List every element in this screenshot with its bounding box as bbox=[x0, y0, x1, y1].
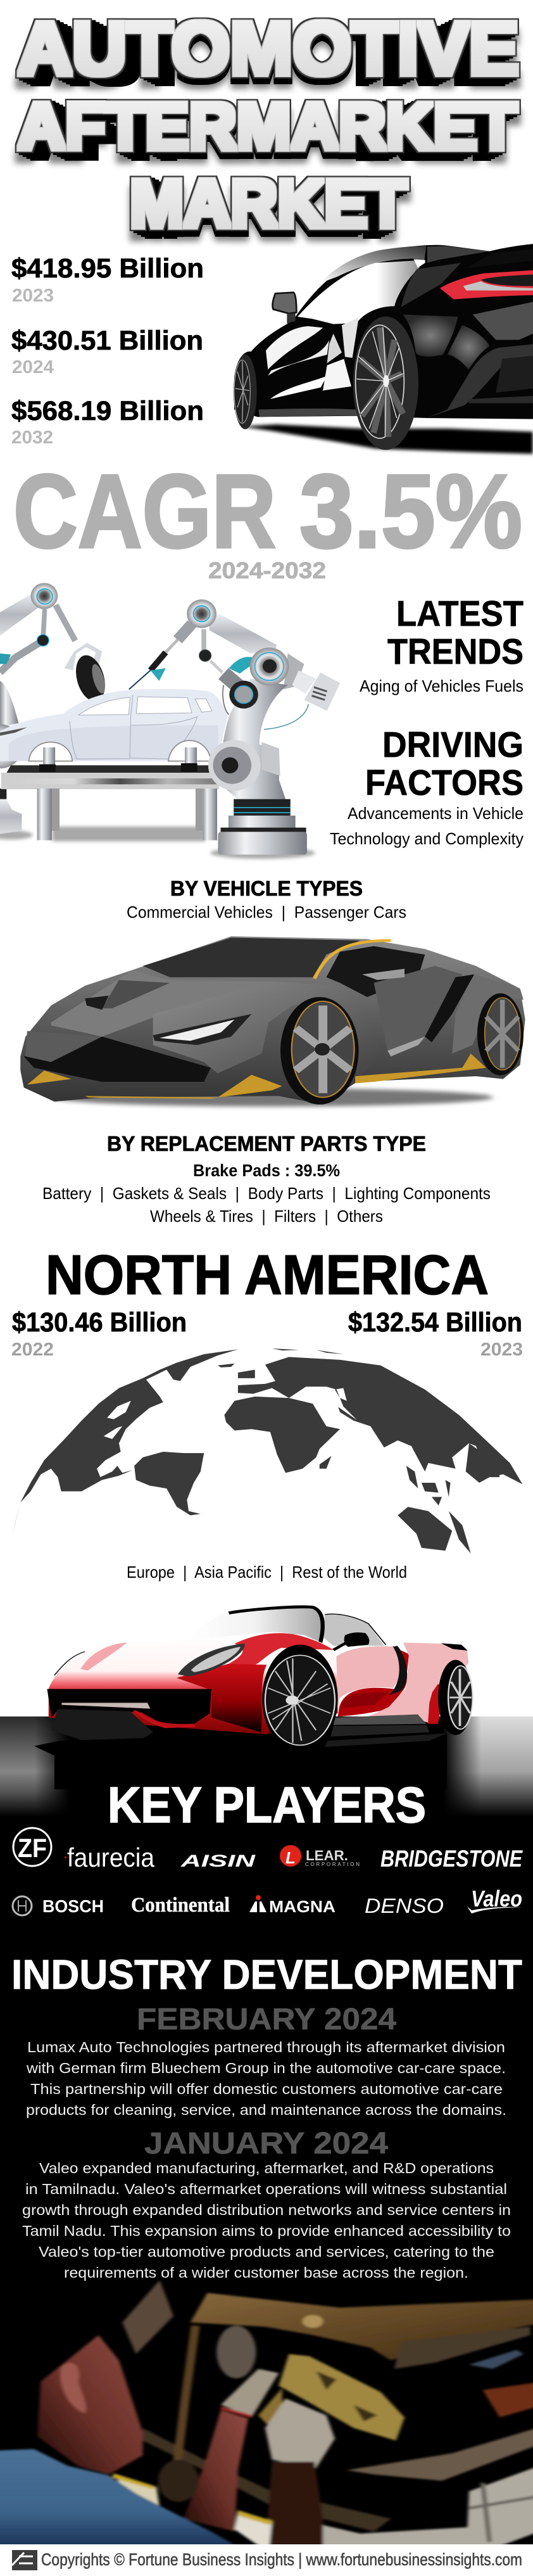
stat: north america 2022: $130.46 Billion bbox=[12, 1307, 187, 1338]
logo: Bosch: BOSCH bbox=[42, 1896, 104, 1916]
heading: driving factors bbox=[365, 725, 524, 803]
text: january 2024 development bbox=[22, 2160, 511, 2281]
CAGR headline: CAGR bbox=[13, 453, 276, 569]
footer background bbox=[0, 2544, 533, 2576]
heading: driving factors: FACTORS bbox=[365, 763, 524, 803]
text: driving factor: Advancements in Vehicle bbox=[348, 804, 524, 823]
text: february 2024 development bbox=[26, 2039, 506, 2118]
text: january 2024 development: requirements of a wider customer base across the region. bbox=[64, 2264, 468, 2281]
text: other regions: Europe | Asia Pacific | Rest of the World bbox=[127, 1563, 407, 1582]
text: january 2024 development: Valeo expanded manufacturing, aftermarket, and R&D operations bbox=[39, 2160, 494, 2176]
icon: Fortune Business Insights logo bbox=[12, 2550, 37, 2570]
logo: AISIN: AISIN bbox=[180, 1851, 256, 1870]
stat: north america 2023: 2023 bbox=[480, 1340, 523, 1360]
text: january 2024 development: Tamil Nadu. This expansion aims to provide enhanced accessibility to bbox=[22, 2223, 511, 2239]
stat: north america 2023 bbox=[348, 1307, 523, 1360]
car body on the line bbox=[0, 689, 228, 766]
logo: ZF bbox=[13, 1828, 51, 1866]
stat: 2023 value: $418.95 Billion bbox=[11, 253, 204, 284]
logo: faurecia: faurecia bbox=[67, 1843, 155, 1872]
text: february 2024 development: products for cleaning, service, and maintenance across the domains. bbox=[26, 2102, 506, 2118]
heading: by vehicle types: BY VEHICLE TYPES bbox=[170, 877, 363, 900]
left robot bbox=[0, 583, 110, 834]
stat: 2024 value bbox=[11, 326, 203, 378]
stat: north america 2022 bbox=[11, 1307, 187, 1360]
right robot bbox=[129, 599, 340, 854]
floor glow: right bbox=[443, 1716, 533, 1817]
stat: 2024 value: $430.51 Billion bbox=[11, 326, 203, 356]
conveyor bbox=[1, 763, 220, 841]
CAGR period: 2024-2032 bbox=[208, 557, 326, 583]
logo: Lear bbox=[280, 1845, 360, 1867]
illustration: red sports car bbox=[34, 1606, 473, 1789]
text: february 2024 development: This partnership will offer domestic customers automotive car-care bbox=[30, 2081, 503, 2097]
floor glow: left bbox=[0, 1716, 70, 1817]
stat: 2032 value: 2032 bbox=[11, 428, 53, 448]
logo: Magna bbox=[249, 1895, 335, 1916]
heading: key players: KEY PLAYERS bbox=[108, 1777, 426, 1833]
text: january 2024 development: growth through expanded distribution networks and service centers in bbox=[22, 2202, 511, 2218]
heading: january 2024: JANUARY 2024 bbox=[144, 2127, 388, 2160]
text: replacement parts list: Battery | Gaskets & Seals | Body Parts | Lighting Components bbox=[42, 1184, 491, 1203]
world map bbox=[13, 1348, 522, 1554]
heading: february 2024: FEBRUARY 2024 bbox=[137, 2003, 396, 2036]
stat: 2023 value: 2023 bbox=[12, 286, 54, 306]
title: line 2: AFTERMARKET bbox=[18, 90, 517, 163]
text: february 2024 development: Lumax Auto Technologies partnered through its aftermarket division bbox=[27, 2039, 505, 2055]
text: latest trend: Aging of Vehicles Fuels bbox=[360, 676, 524, 695]
heading: by replacement parts type: BY REPLACEMENT PARTS TYPE bbox=[107, 1132, 426, 1155]
logo: Lear: CORPORATION bbox=[305, 1862, 360, 1867]
title: line 1: AUTOMOTIVE bbox=[18, 7, 519, 91]
title: line 3: MARKET bbox=[130, 165, 407, 241]
stat: 2023 value bbox=[11, 253, 204, 306]
text: vehicle type list: Commercial Vehicles | Passenger Cars bbox=[127, 903, 406, 922]
text: january 2024 development: Valeo's top-tier automotive products and services, catering to the bbox=[39, 2243, 494, 2260]
logo: ZF: ZF bbox=[18, 1833, 47, 1863]
logo: Continental: Continental bbox=[131, 1894, 230, 1917]
text: driving factor: Technology and Complexity bbox=[330, 829, 524, 848]
logo: Valeo: Valeo bbox=[471, 1886, 522, 1912]
text: driving factor bbox=[330, 804, 524, 848]
heading: latest trends bbox=[387, 593, 524, 672]
CAGR headline: 3.5% bbox=[299, 453, 522, 569]
logo: Lear: L bbox=[285, 1848, 296, 1867]
stat: 2032 value: $568.19 Billion bbox=[11, 396, 204, 426]
stat: north america 2022: 2022 bbox=[11, 1340, 54, 1360]
logo: Bosch bbox=[13, 1896, 104, 1916]
stat: north america 2023: $132.54 Billion bbox=[348, 1307, 522, 1338]
logo: Magna: MAGNA bbox=[269, 1897, 335, 1916]
heading: north america: NORTH AMERICA bbox=[46, 1243, 489, 1306]
photo: mechanic working under a car bbox=[0, 2280, 533, 2553]
heading: latest trends: LATEST bbox=[396, 593, 524, 634]
illustration: black sports car bbox=[234, 244, 533, 454]
illustration: grey supercar bbox=[20, 936, 525, 1107]
stat: 2024 value: 2024 bbox=[12, 357, 54, 378]
stat: 2032 value bbox=[11, 396, 204, 448]
CAGR headline bbox=[13, 453, 522, 569]
background: black lower section bbox=[0, 1716, 533, 2546]
logo: Denso: DENSO bbox=[365, 1894, 444, 1917]
illustration: robots assembling a car bbox=[0, 583, 340, 859]
heading: driving factors: DRIVING bbox=[382, 725, 524, 765]
text: replacement parts list: Wheels & Tires | Filters | Others bbox=[150, 1207, 383, 1226]
text: february 2024 development: with German firm Bluechem Group in the automotive car-care space. bbox=[26, 2060, 506, 2076]
logo: Lear: LEAR. bbox=[306, 1848, 348, 1863]
text: brake pads share: Brake Pads : 39.5% bbox=[193, 1161, 340, 1180]
text: replacement parts list bbox=[42, 1184, 491, 1226]
text: january 2024 development: in Tamilnadu. Valeo's aftermarket operations will witness substantial bbox=[25, 2181, 507, 2197]
heading: latest trends: TRENDS bbox=[387, 631, 524, 672]
